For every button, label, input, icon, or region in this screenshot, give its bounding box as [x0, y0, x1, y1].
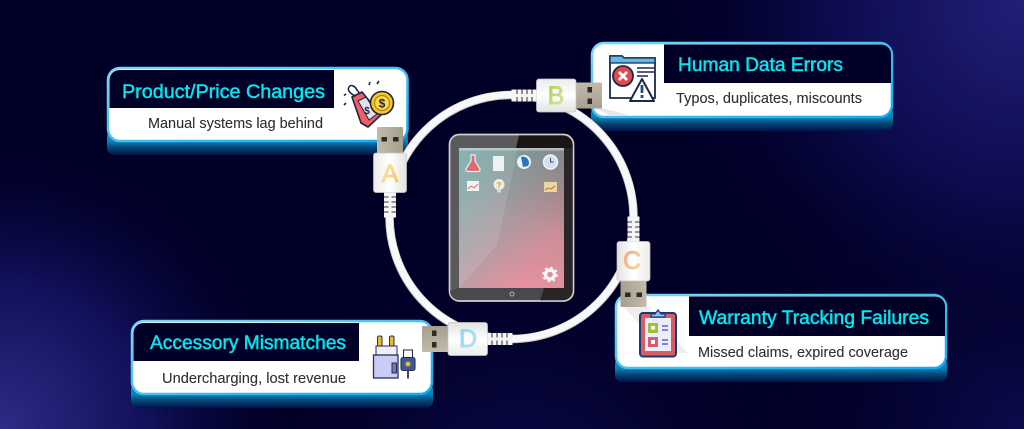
- tablet bezel: [450, 134, 574, 301]
- tablet screen: [459, 148, 564, 288]
- app icons: ?: [497, 181, 502, 190]
- heading: Product/Price Changes: [122, 81, 325, 103]
- letter C: C: [623, 247, 641, 275]
- shadow of plug on card: [594, 108, 632, 116]
- heading: Warranty Tracking Failures: [699, 307, 929, 329]
- shadow of plug on card: [624, 307, 688, 353]
- description: Missed claims, expired coverage: [698, 345, 908, 361]
- icon: error window with warning: [610, 56, 655, 101]
- app icons: [466, 155, 558, 282]
- heading: Human Data Errors: [678, 54, 843, 76]
- description: Manual systems lag behind: [148, 116, 323, 132]
- connector C: [617, 216, 650, 307]
- cable ring: [390, 95, 634, 339]
- letter D: D: [459, 325, 477, 353]
- home button: [510, 292, 514, 296]
- icon: price tag with coin: [344, 81, 394, 127]
- icon: charger and cable: [374, 336, 415, 378]
- panel: Human Data Errors: [591, 43, 893, 131]
- icon: price tag with coin: $: [364, 106, 370, 117]
- letter B: B: [548, 82, 564, 110]
- letter A: A: [382, 160, 399, 188]
- icon: clipboard checklist: [640, 310, 676, 356]
- tablet: [450, 134, 574, 301]
- heading: Accessory Mismatches: [150, 332, 346, 354]
- connector D: [422, 322, 512, 356]
- screen gloss: [459, 148, 518, 288]
- panel: Accessory Mismatches: [131, 321, 433, 408]
- panel: Product/Price Changes: [107, 68, 408, 155]
- connector B: [512, 79, 602, 112]
- icon: price tag with coin: $: [379, 96, 386, 110]
- panel: Warranty Tracking Failures: [615, 295, 947, 382]
- connector A: [374, 127, 406, 218]
- description: Undercharging, lost revenue: [162, 371, 346, 387]
- description: Typos, duplicates, miscounts: [676, 91, 862, 107]
